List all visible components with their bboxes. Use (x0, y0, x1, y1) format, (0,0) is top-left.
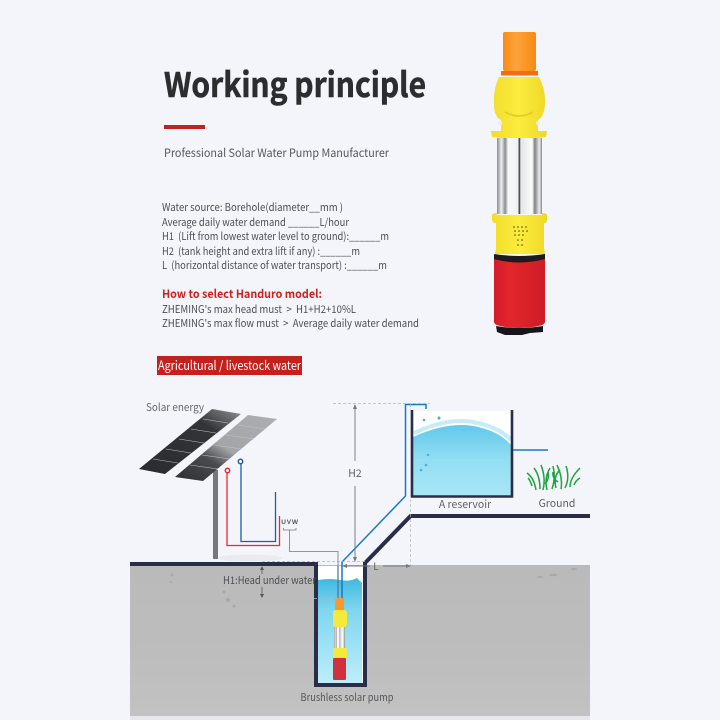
second pipe in well (337, 566, 339, 598)
reservoir outflow pipe (513, 449, 548, 451)
text block: water requirements: Average daily water demand ______L/hour (162, 215, 350, 230)
text block: water requirements: H1 (Lift from lowest water level to ground):______m (162, 229, 389, 244)
label: solar energy: Solar energy (146, 400, 204, 415)
icon: grass (527, 465, 580, 490)
dimension: L: L (373, 558, 379, 573)
dimension: H1: H1:Head under water (223, 573, 317, 588)
reservoir (412, 410, 512, 496)
blue delivery pipe (342, 404, 426, 598)
UVW terminal and cable: UVW (281, 519, 299, 526)
dimension guides (262, 404, 430, 598)
wiring: red and blue cables (225, 459, 280, 546)
small pump in well (333, 598, 347, 680)
right panel (175, 415, 277, 481)
text block: water requirements: H2 (tank height and extra lift if any) :______m (162, 244, 360, 259)
product photo: solar pump (491, 32, 547, 335)
label: reservoir: A reservoir (439, 497, 492, 512)
dimension: L (342, 558, 411, 573)
label: brushless solar pump: Brushless solar pump (300, 690, 394, 705)
dimension: H2: H2 (348, 466, 362, 481)
text block: water requirements (162, 200, 389, 273)
ground outline (130, 516, 590, 685)
dimension: H2 (348, 404, 362, 562)
ground (130, 565, 590, 720)
title: Working principle (164, 58, 426, 107)
left panel (139, 409, 241, 474)
text block: how to select model (162, 286, 419, 331)
mount shadow (218, 554, 282, 562)
well with water (316, 566, 365, 685)
UVW terminal and cable (281, 519, 338, 598)
text block: how to select model: ZHEMING's max flow must > Average daily water demand (162, 316, 419, 331)
text block: water requirements: Water source: Borehole(diameter__mm ) (162, 200, 343, 215)
banner: agricultural water: Agricultural / livestock water (158, 355, 301, 374)
text block: water requirements: L (horizontal distance of water transport) :______m (162, 258, 387, 273)
support pole (213, 470, 218, 559)
solar array (139, 409, 282, 562)
subtitle: Professional Solar Water Pump Manufacturer (164, 145, 390, 161)
label: ground: Ground (539, 496, 575, 511)
title accent bar (164, 125, 205, 129)
text block: how to select model: ZHEMING's max head must > H1+H2+10%L (162, 302, 356, 317)
text block: how to select model: How to select Handuro model: (162, 286, 322, 302)
dimension: H1 (223, 566, 317, 598)
